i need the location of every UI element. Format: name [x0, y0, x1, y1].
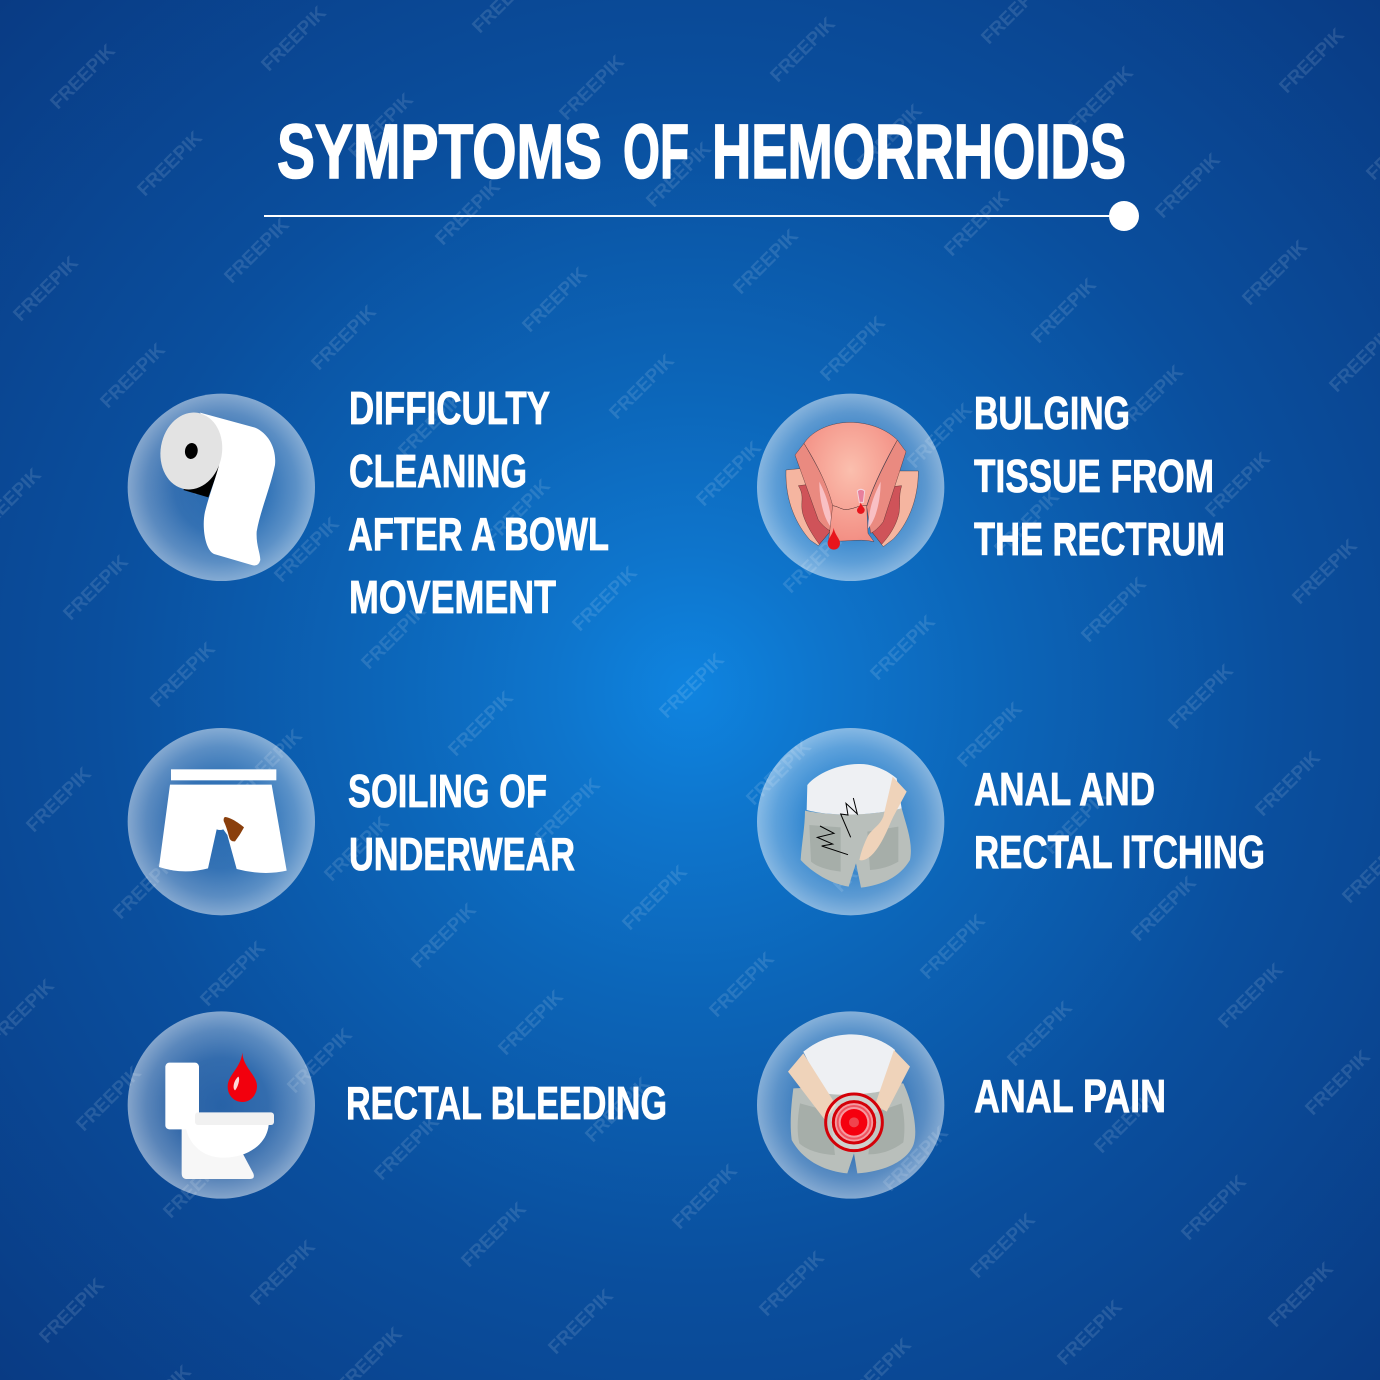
watermark pattern: FREEPIK [110, 850, 183, 924]
watermark pattern: FREEPIK [743, 736, 816, 810]
watermark pattern: FREEPIK [284, 1024, 357, 1098]
watermark pattern: FREEPIK [147, 638, 220, 712]
watermark pattern: FREEPIK [867, 611, 940, 685]
panel: difficulty cleaning [128, 382, 609, 623]
text: bulging tissue from the rectrum: TISSUE FROM [974, 450, 1214, 502]
text: difficulty cleaning after a bowl movement: AFTER A BOWL [348, 508, 609, 560]
watermark pattern: FREEPIK [606, 350, 679, 424]
watermark pattern: FREEPIK [1004, 997, 1077, 1071]
watermark pattern: FREEPIK [60, 551, 133, 625]
panel: bulging tissue [757, 387, 1225, 581]
watermark pattern: FREEPIK [221, 214, 294, 288]
text: anal and rectal itching: RECTAL ITCHING [974, 826, 1265, 878]
text: anal and rectal itching: ANAL AND [974, 763, 1155, 815]
watermark pattern: FREEPIK [693, 437, 766, 511]
text: bulging tissue from the rectrum: THE RECTRUM [974, 513, 1225, 565]
watermark pattern: FREEPIK [1041, 785, 1114, 859]
icon: itching [757, 728, 944, 915]
watermark pattern: FREEPIK [1128, 872, 1201, 946]
watermark pattern: FREEPIK [532, 774, 605, 848]
watermark pattern: FREEPIK [780, 524, 853, 598]
panel: anal and rectal itching [757, 728, 1265, 915]
watermark pattern: FREEPIK [73, 1062, 146, 1136]
watermark pattern: FREEPIK [904, 399, 977, 473]
watermark pattern: FREEPIK [730, 225, 803, 299]
icon: rectum cross-section [757, 394, 944, 581]
watermark pattern: FREEPIK [445, 687, 518, 761]
panel: rectal bleeding [128, 1011, 667, 1199]
panel: anal pain [757, 1011, 1166, 1199]
watermark pattern: FREEPIK [830, 823, 903, 897]
watermark pattern: FREEPIK [706, 948, 779, 1022]
watermark pattern: FREEPIK [308, 301, 381, 375]
text: soiling of underwear: SOILING OF [348, 765, 547, 817]
watermark pattern: FREEPIK [1276, 24, 1349, 98]
text: rectal bleeding: RECTAL BLEEDING [346, 1077, 667, 1129]
text: soiling of underwear: UNDERWEAR [349, 828, 575, 880]
watermark pattern: FREEPIK [97, 339, 170, 413]
watermark pattern: FREEPIK [247, 1236, 320, 1310]
watermark pattern: FREEPIK [669, 1160, 742, 1234]
text: bulging tissue from the rectrum: BULGING [974, 387, 1130, 439]
text: anal pain: ANAL PAIN [974, 1070, 1166, 1122]
watermark pattern: FREEPIK [569, 562, 642, 636]
watermark pattern: FREEPIK [134, 127, 207, 201]
watermark pattern: FREEPIK [967, 1209, 1040, 1283]
watermark pattern: FREEPIK [767, 13, 840, 87]
text: bulging tissue from the rectrum [974, 387, 1225, 565]
watermark pattern: FREEPIK [1302, 1046, 1375, 1120]
watermark pattern: FREEPIK [395, 388, 468, 462]
watermark pattern: FREEPIK [1115, 361, 1188, 435]
watermark pattern: FREEPIK [23, 763, 96, 837]
title: HEMORRHOIDS [712, 109, 1126, 195]
watermark pattern: FREEPIK [358, 600, 431, 674]
watermark pattern: FREEPIK [1028, 274, 1101, 348]
watermark pattern: FREEPIK [1178, 1171, 1251, 1245]
watermark pattern: FREEPIK [941, 187, 1014, 261]
watermark pattern: FREEPIK [854, 100, 927, 174]
icon: toilet paper roll [128, 394, 315, 581]
watermark pattern: FREEPIK [1202, 448, 1275, 522]
watermark pattern: FREEPIK [756, 1247, 829, 1321]
text: soiling of underwear [348, 765, 575, 880]
watermark pattern: FREEPIK [1152, 149, 1225, 223]
watermark pattern: FREEPIK [793, 1035, 866, 1109]
watermark pattern: FREEPIK [482, 475, 555, 549]
title [277, 109, 1126, 195]
watermark pattern: FREEPIK [545, 1285, 618, 1359]
watermark pattern: FREEPIK [556, 51, 629, 125]
watermark pattern: FREEPIK [458, 1198, 531, 1272]
watermark pattern: FREEPIK [1215, 959, 1288, 1033]
watermark pattern: FREEPIK [656, 649, 729, 723]
watermark pattern: FREEPIK [432, 176, 505, 250]
watermark pattern: FREEPIK [1078, 573, 1151, 647]
title underline with dot [264, 201, 1139, 231]
watermark pattern: FREEPIK [917, 910, 990, 984]
watermark pattern: FREEPIK [880, 1122, 953, 1196]
text: difficulty cleaning after a bowl movement: DIFFICULTY [349, 382, 550, 434]
watermark pattern: FREEPIK [271, 513, 344, 587]
watermark pattern: FREEPIK [47, 40, 120, 114]
watermark pattern: FREEPIK [954, 698, 1027, 772]
watermark pattern: FREEPIK [643, 138, 716, 212]
watermark pattern: FREEPIK [1252, 747, 1325, 821]
watermark pattern: FREEPIK [519, 263, 592, 337]
text: difficulty cleaning after a bowl movement [348, 382, 609, 623]
text: difficulty cleaning after a bowl movement: MOVEMENT [349, 571, 556, 623]
watermark pattern: FREEPIK [619, 861, 692, 935]
watermark pattern: FREEPIK [1065, 62, 1138, 136]
watermark pattern: FREEPIK [371, 1111, 444, 1185]
watermark pattern: FREEPIK [184, 426, 257, 500]
watermark pattern: FREEPIK [160, 1149, 233, 1223]
watermark pattern: FREEPIK [1054, 1296, 1127, 1370]
watermark pattern: FREEPIK [1289, 535, 1362, 609]
text: difficulty cleaning after a bowl movement: CLEANING [349, 445, 527, 497]
icon: pain target on shorts [757, 1011, 944, 1199]
watermark pattern: FREEPIK [991, 486, 1064, 560]
icon: soiled underwear [128, 728, 315, 915]
icon: toilet with blood drop [128, 1011, 315, 1199]
watermark pattern: FREEPIK [1165, 660, 1238, 734]
title: SYMPTOMS [277, 109, 602, 195]
panel: soiling of underwear [128, 728, 575, 915]
watermark pattern: FREEPIK [1239, 236, 1312, 310]
watermark pattern: FREEPIK [36, 1274, 109, 1348]
watermark pattern: FREEPIK [10, 252, 83, 326]
watermark pattern: FREEPIK [321, 812, 394, 886]
text: anal and rectal itching [974, 763, 1265, 878]
title: OF [623, 109, 689, 195]
watermark pattern: FREEPIK [258, 2, 331, 76]
watermark pattern: FREEPIK [197, 937, 270, 1011]
watermark pattern: FREEPIK [1265, 1258, 1338, 1332]
watermark pattern: FREEPIK [1091, 1084, 1164, 1158]
watermark pattern: FREEPIK [408, 899, 481, 973]
watermark pattern: FREEPIK [234, 725, 307, 799]
watermark pattern: FREEPIK [495, 986, 568, 1060]
watermark pattern: FREEPIK [582, 1073, 655, 1147]
watermark pattern: FREEPIK [817, 312, 890, 386]
watermark pattern: FREEPIK [345, 89, 418, 163]
